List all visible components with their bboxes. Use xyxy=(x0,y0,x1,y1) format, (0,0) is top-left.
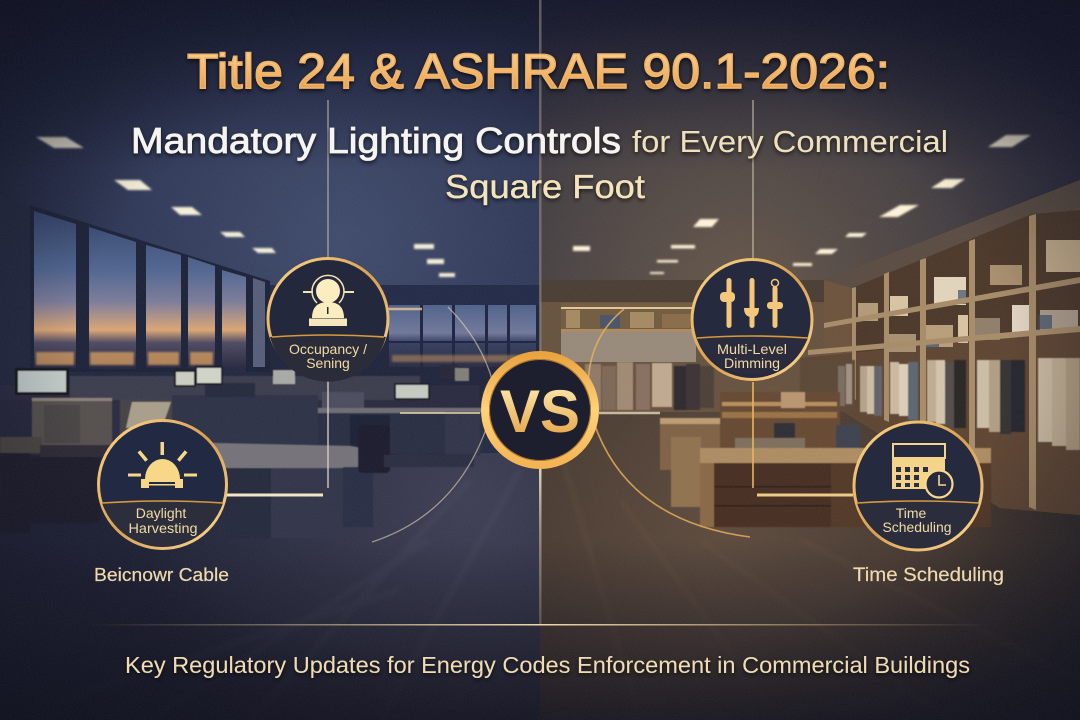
ceiling lights xyxy=(36,137,455,277)
badge: daylight harvesting xyxy=(98,420,226,548)
right caption: Time Scheduling xyxy=(853,565,1004,586)
badge: daylight harvesting: Harvesting xyxy=(128,520,198,536)
store floor xyxy=(540,412,1080,720)
icon: occupancy person xyxy=(303,275,354,326)
back clothes xyxy=(585,362,714,410)
floor streaks xyxy=(60,470,520,720)
badge label: Time xyxy=(896,505,927,521)
badge: time scheduling xyxy=(854,422,982,550)
badge lower band xyxy=(102,501,223,546)
shelf boards xyxy=(808,214,1080,510)
divider rule xyxy=(90,624,990,626)
window panes xyxy=(34,211,265,372)
center divider line xyxy=(539,0,542,355)
badge lower band xyxy=(857,501,979,548)
title xyxy=(131,45,948,205)
connector lines xyxy=(226,100,853,625)
shelving wall xyxy=(660,180,1080,527)
badge label: Occupancy / xyxy=(289,341,367,357)
round table xyxy=(213,443,382,468)
store ceiling xyxy=(540,0,1080,280)
badge: occupancy sensing xyxy=(268,258,388,382)
VS text: VS xyxy=(500,378,580,445)
icon: sliders xyxy=(720,278,783,328)
desks and partitions xyxy=(0,365,483,538)
icon: calendar and clock xyxy=(892,444,952,498)
ceiling lights xyxy=(573,135,1031,274)
title line 3: Square Foot xyxy=(445,168,645,205)
badge label: Multi-Level xyxy=(717,341,787,357)
center tables xyxy=(660,392,991,527)
badge label: Daylight xyxy=(136,505,186,521)
office ceiling xyxy=(0,0,540,290)
monitors xyxy=(15,368,69,395)
title line 1: Title 24 & ASHRAE 90.1-2026: xyxy=(187,45,890,99)
title line 2: Mandatory Lighting Controls xyxy=(131,120,621,161)
left caption: Beicnowr Cable xyxy=(94,565,229,585)
badge: multi-level dimming: Dimming xyxy=(724,355,780,371)
left desks and chairs xyxy=(0,437,42,453)
office floor xyxy=(0,453,540,720)
left half: office scene xyxy=(0,0,540,720)
city lights xyxy=(36,352,532,365)
badge: time scheduling: Scheduling xyxy=(882,519,952,535)
badge: multi-level dimming xyxy=(692,260,812,380)
badge lower band xyxy=(697,336,808,375)
back wall windows xyxy=(270,285,540,400)
badge: occupancy sensing: Sening xyxy=(306,355,350,371)
floor boards xyxy=(560,450,1080,720)
VS badge xyxy=(485,355,595,465)
icon: sun over fixture xyxy=(128,442,197,488)
back wall xyxy=(540,280,830,415)
shelved boxes xyxy=(858,240,1080,352)
title line 2 suffix: for Every Commercial xyxy=(632,124,948,159)
badge lower band xyxy=(270,335,386,382)
hanging clothes xyxy=(800,358,1080,450)
window frames xyxy=(30,205,270,372)
footer text: Key Regulatory Updates for Energy Codes Enforcement in Commercial Buildings xyxy=(125,652,970,678)
left wall xyxy=(0,195,270,400)
